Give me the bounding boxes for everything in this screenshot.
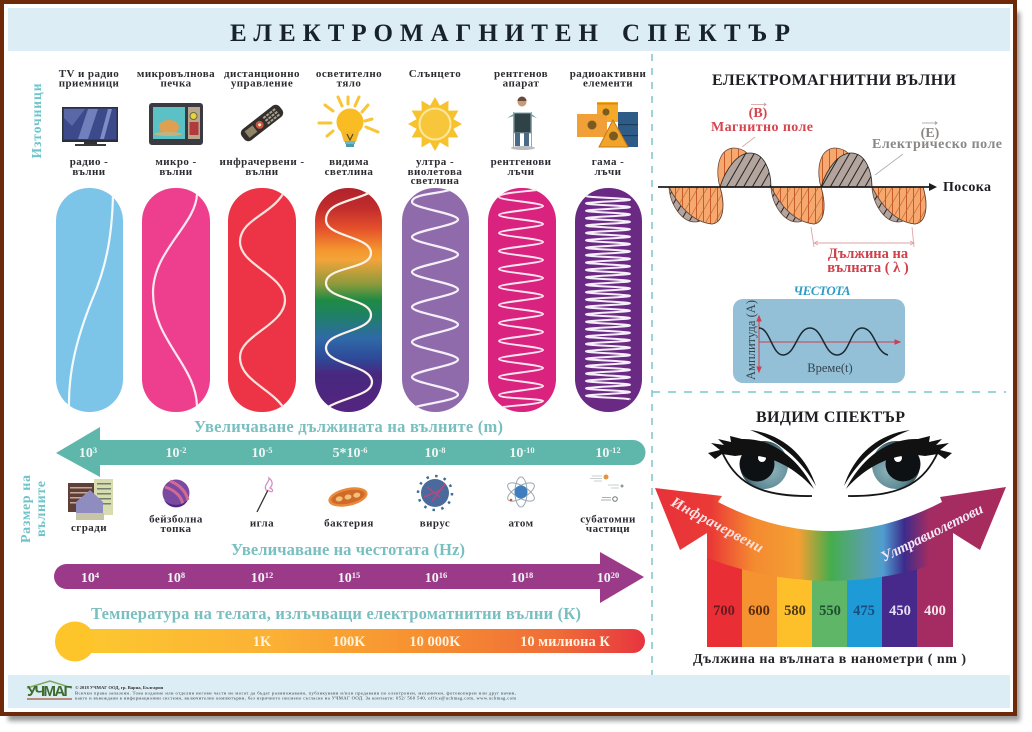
arrow: wavelength scale: -10 — [523, 445, 535, 455]
arrow: wavelength scale: -8 — [438, 445, 446, 455]
source labels row — [59, 68, 647, 90]
heading: wavelength increase: Увеличаване дължината на вълните (m) — [194, 417, 503, 436]
size labels row: бактерия — [324, 518, 374, 530]
chart: visible spectrum arrow — [655, 487, 1006, 647]
size labels row: атом — [508, 518, 534, 530]
icon: light bulb — [319, 97, 378, 147]
arrow: frequency scale: 10 — [338, 571, 352, 586]
icon: television — [62, 107, 118, 146]
size labels row: топка — [160, 523, 192, 535]
arrow: wavelength scale — [56, 427, 646, 477]
arrow: frequency scale — [54, 552, 644, 603]
panel: gamma rays — [575, 188, 642, 412]
size labels row: субатомни — [580, 514, 636, 526]
chart: visible spectrum arrow: Ултравиолетови — [879, 501, 986, 566]
arrow: wavelength scale: -2 — [179, 445, 187, 455]
heading: body temperature: Температура на телата, излъчващи електроматнитни вълни (К) — [91, 604, 581, 623]
size labels row — [71, 514, 636, 535]
title bar: СПЕКТЪР — [622, 20, 790, 47]
wave type labels row: гама - — [592, 156, 624, 168]
source labels row: TV и радио — [59, 68, 119, 80]
arrow: wavelength scale: -5 — [265, 445, 273, 455]
chart: frequency graph: Време(t) — [807, 361, 853, 375]
icon: subatomic particles — [590, 474, 624, 501]
arrow: wavelength scale: -12 — [609, 445, 621, 455]
source labels row: осветително — [316, 68, 382, 80]
arrow: frequency scale: 10 — [511, 571, 525, 586]
arrow: wavelength scale: 3 — [93, 445, 97, 455]
label: wavelength — [827, 246, 909, 276]
wave type labels row: виолетова — [408, 166, 462, 178]
chart: visible spectrum arrow: 580 — [784, 603, 806, 619]
chart: visible spectrum arrow: 400 — [924, 603, 946, 619]
footer — [8, 675, 1010, 708]
temperature bar: 100K — [332, 634, 366, 650]
label: electric field — [872, 122, 1002, 152]
source labels row: управление — [231, 78, 293, 90]
label: direction: Посока — [943, 180, 991, 195]
size labels row: частици — [586, 523, 630, 535]
icon: virus — [418, 476, 452, 510]
source labels row: печка — [160, 78, 192, 90]
wave type labels row: лъчи — [508, 166, 535, 178]
source labels row: рентгенов — [494, 68, 548, 80]
wave type labels row: лъчи — [595, 166, 622, 178]
wave type labels row: светлина — [411, 175, 459, 187]
arrow: wavelength scale: 10 — [595, 446, 609, 461]
label: wavelength: вълната ( λ ) — [827, 260, 909, 276]
arrow: frequency scale: 4 — [95, 570, 100, 580]
label: electric field: (E) — [921, 126, 940, 141]
size labels row: бейзболна — [149, 514, 203, 526]
wave type labels row: радио - — [70, 156, 108, 168]
source labels row: дистанционно — [224, 68, 300, 80]
temperature bar: 10 милиона К — [520, 634, 610, 650]
wave type labels row: вълни — [245, 166, 279, 178]
temperature bar: 1K — [253, 634, 272, 650]
label: magnetic field: Магнитно поле — [711, 120, 813, 135]
source labels row: радиоактивни — [570, 68, 647, 80]
chart: visible spectrum arrow: 700 — [713, 603, 735, 619]
footer: Всички права запазени. Това издание или отделни негови части не могат да бъдат размножавани, публикувани и/или предавани по електронен, механичен, фотокопирен или друг начин, — [75, 690, 516, 696]
arrow: frequency scale: 12 — [265, 570, 273, 580]
arrow: wavelength scale: 10 — [79, 446, 93, 461]
source labels row: апарат — [503, 78, 539, 90]
icon: bacterium — [327, 484, 369, 510]
wave type labels row — [70, 156, 624, 187]
wave type labels row: вълни — [159, 166, 193, 178]
arrow: frequency scale: 20 — [611, 570, 619, 580]
panel: infrared waves — [228, 188, 296, 412]
icon: sun — [408, 97, 462, 151]
arrow: frequency scale: 16 — [439, 570, 447, 580]
wave type labels row: светлина — [325, 166, 373, 178]
section divider lines — [652, 54, 1006, 675]
heading: frequency increase: Увеличаване на честотата (Hz) — [231, 540, 465, 559]
icon: baseball — [162, 480, 190, 507]
arrow: frequency scale: 10 — [81, 571, 95, 586]
arrow: frequency scale: 10 — [251, 571, 265, 586]
icon: remote control — [239, 103, 285, 143]
panel: x-rays — [488, 188, 556, 412]
chart: frequency graph: Амплитуда (А) — [744, 300, 758, 380]
panel: ultraviolet light — [402, 188, 469, 412]
arrow: wavelength scale: 10 — [251, 446, 265, 461]
heading: electromagnetic waves: ЕЛЕКТРОМАГНИТНИ ВЪЛНИ — [712, 72, 957, 89]
wave type labels row: инфрачервени - — [220, 156, 304, 168]
source labels row: тяло — [337, 78, 361, 90]
icon: needle — [257, 478, 273, 512]
label: wavelength in nanometers: Дължина на вълната в нанометри ( nm ) — [693, 652, 966, 667]
icon: microwave — [149, 103, 203, 145]
icon: radioactive barrels — [577, 102, 638, 147]
icon: atom — [505, 477, 537, 507]
panel: radio waves — [56, 188, 123, 412]
side label: wave size: Размер на — [19, 475, 34, 543]
title bar — [8, 8, 1010, 51]
size labels row: игла — [250, 518, 274, 530]
label: magnetic field — [711, 103, 813, 135]
icon: x-ray machine — [507, 96, 537, 150]
temperature bar — [55, 622, 645, 662]
footer: © 2018 УЧМАГ ООД, гр. Варна, България — [75, 685, 164, 690]
arrow: wavelength scale: -6 — [360, 445, 368, 455]
wave type labels row: вълни — [72, 166, 106, 178]
source labels row: елементи — [583, 78, 633, 90]
label: electric field: Електрическо поле — [872, 137, 1002, 152]
arrow: frequency scale: 18 — [525, 570, 533, 580]
arrow: frequency scale: 8 — [181, 570, 185, 580]
heading: frequency: ЧЕСТОТА — [794, 283, 851, 298]
source labels row: микровълнова — [137, 68, 215, 80]
temperature bar: 10 000K — [409, 634, 461, 650]
chart: visible spectrum arrow: 450 — [889, 603, 911, 619]
side label: sources: Източници — [29, 83, 44, 158]
side label: wave size — [19, 475, 49, 543]
footer: УЧМАГ — [27, 683, 72, 700]
size labels row: сгради — [71, 522, 107, 534]
wave type labels row: ултра - — [416, 156, 454, 168]
source labels row: приемници — [59, 78, 119, 90]
arrow: frequency scale: 10 — [597, 571, 611, 586]
arrow: wavelength scale: 10 — [509, 446, 523, 461]
chart: frequency graph — [733, 299, 905, 383]
wave type labels row: микро - — [155, 156, 197, 168]
arrow: wavelength scale: 10 — [424, 446, 438, 461]
chart: visible spectrum arrow: 550 — [819, 603, 841, 619]
arrow: wavelength scale: 10 — [165, 446, 179, 461]
wave type labels row: видима — [329, 156, 369, 168]
arrow: frequency scale: 10 — [425, 571, 439, 586]
size labels row: вирус — [420, 518, 450, 530]
chart: visible spectrum arrow: 475 — [853, 603, 875, 619]
footer: както и въвеждани в информационни системи, включително компютърни, без изричното писмено съгласие на УЧМАГ ООД. За контакти: 052/ 560 540, office@uchmag.com, www.uchmag.com — [75, 696, 516, 702]
panel: microwaves — [142, 188, 210, 412]
icon: left eye — [708, 430, 816, 496]
icon: right eye — [844, 430, 952, 496]
chart: electromagnetic wave diagram — [658, 137, 937, 247]
chart: visible spectrum arrow: Инфрачервени — [667, 494, 766, 556]
wave type labels row: рентгенови — [491, 156, 552, 168]
title bar: ЕЛЕКТРОМАГНИТЕН — [230, 20, 599, 47]
side label: wave size: вълните — [34, 481, 49, 537]
heading: visible spectrum: ВИДИМ СПЕКТЪР — [756, 409, 905, 426]
label: wavelength: Дължина на — [828, 246, 909, 262]
chart: visible spectrum arrow: 600 — [748, 603, 770, 619]
arrow: frequency scale: 10 — [167, 571, 181, 586]
source labels row: Слънцето — [409, 68, 461, 80]
arrow: wavelength scale: 5*10 — [332, 446, 360, 461]
label: magnetic field: (B) — [749, 106, 768, 121]
icon: buildings — [68, 479, 113, 520]
panel: visible light — [315, 188, 382, 412]
arrow: frequency scale: 15 — [352, 570, 360, 580]
